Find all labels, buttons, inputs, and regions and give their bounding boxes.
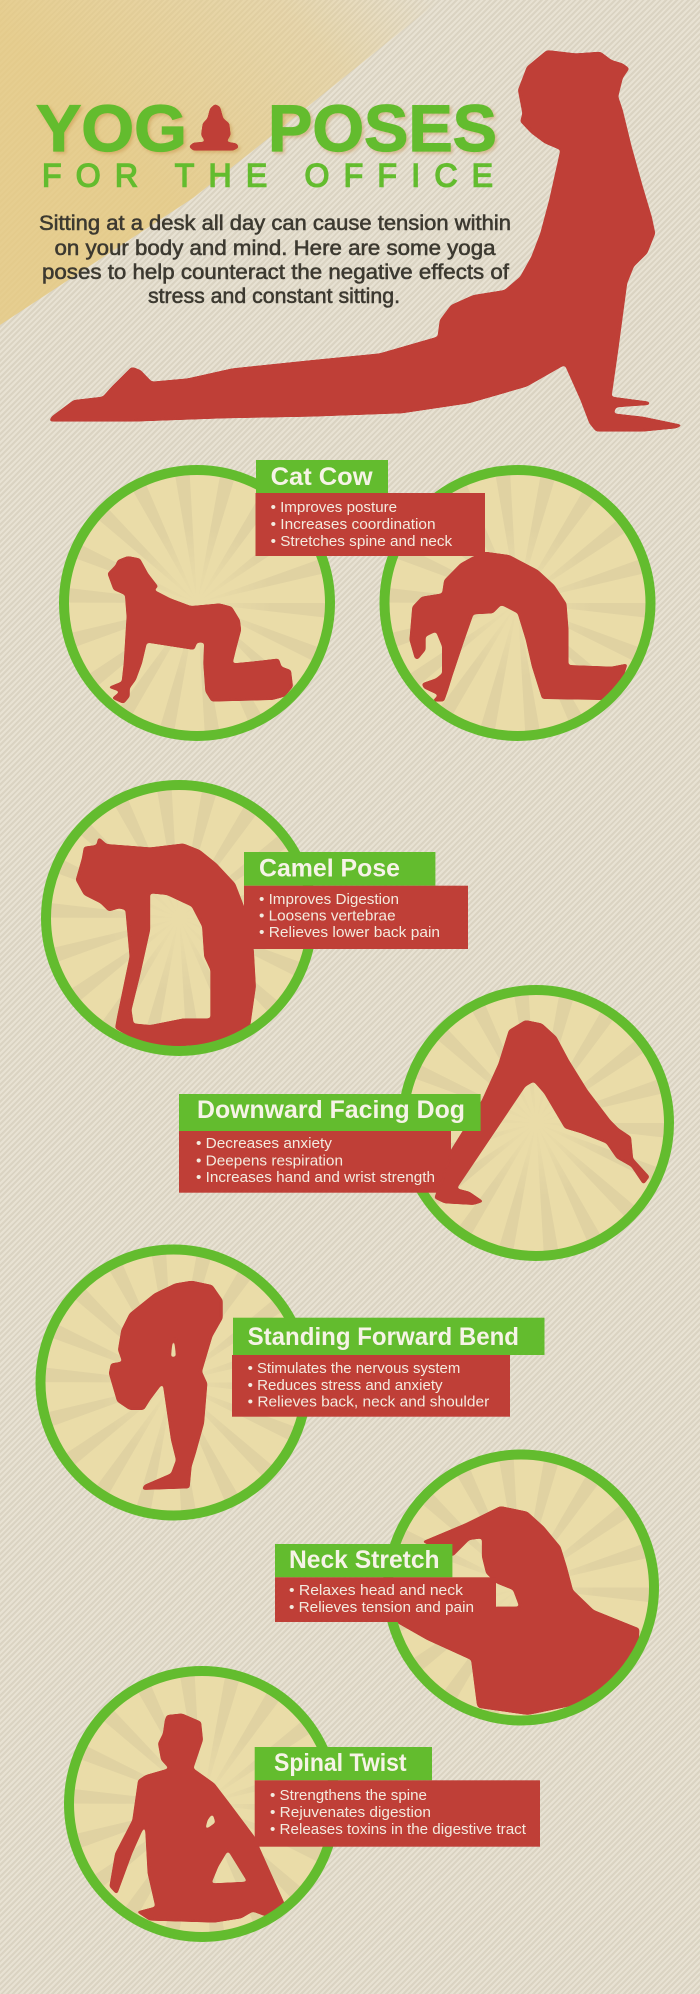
silhouette: forward bend: [109, 1281, 223, 1490]
benefits: standing forward bend: • Stimulates the nervous system: [248, 1361, 460, 1377]
silhouette: spinal twist: [109, 1713, 285, 1923]
background corner triangle: [0, 0, 440, 325]
label: downward facing dog title: [179, 1094, 481, 1131]
silhouette: neck stretch: [395, 1506, 639, 1715]
title: [36, 91, 497, 165]
benefits: cat cow: • Stretches spine and neck: [271, 534, 453, 550]
label: standing forward bend title: [233, 1318, 544, 1355]
silhouette: cow pose: [409, 552, 628, 702]
label: spinal twist title: Spinal Twist: [274, 1749, 407, 1777]
silhouette: downward dog: [434, 1020, 650, 1205]
label: cat cow title: Cat Cow: [271, 463, 373, 491]
intro paragraph: Sitting at a desk all day can cause tension within: [39, 212, 511, 235]
label: neck stretch title: Neck Stretch: [289, 1546, 440, 1574]
silhouette: camel pose: [76, 837, 256, 1047]
benefits: camel pose: • Loosens vertebrae: [259, 909, 396, 925]
label: camel pose title: [244, 852, 435, 886]
benefits: downward facing dog: • Decreases anxiety: [196, 1136, 333, 1152]
benefits: camel pose: • Improves Digestion: [259, 892, 399, 908]
benefits: downward facing dog: • Deepens respiration: [196, 1154, 343, 1170]
intro paragraph: [39, 212, 511, 308]
hero: cobra pose silhouette: [49, 50, 683, 432]
panel: camel pose: [45, 784, 468, 1052]
benefits: standing forward bend: [232, 1355, 510, 1417]
benefits: spinal twist: • Releases toxins in the digestive tract: [270, 1822, 526, 1838]
benefits: cat cow: • Improves posture: [271, 500, 397, 516]
benefits: cat cow: [256, 493, 485, 556]
benefits: spinal twist: • Strengthens the spine: [270, 1788, 427, 1804]
benefits: downward facing dog: • Increases hand and wrist strength: [196, 1170, 435, 1186]
benefits: spinal twist: • Rejuvenates digestion: [270, 1805, 431, 1821]
benefits: neck stretch: • Relaxes head and neck: [289, 1583, 464, 1599]
benefits: neck stretch: • Relieves tension and pain: [289, 1600, 474, 1616]
benefits: neck stretch: [275, 1577, 496, 1622]
label: standing forward bend title: Standing Forward Bend: [248, 1323, 519, 1351]
benefits: cat cow: • Increases coordination: [271, 517, 436, 533]
benefits: camel pose: • Relieves lower back pain: [259, 925, 440, 941]
silhouette: cat pose: [107, 556, 293, 704]
label: cat cow title: [256, 460, 388, 493]
panel: downward facing dog: [179, 989, 670, 1257]
title: YOG: [36, 91, 187, 165]
panel: standing forward bend: [40, 1248, 544, 1516]
benefits: spinal twist: [255, 1780, 540, 1847]
panel: neck stretch: [275, 1454, 655, 1722]
subtitle: FOR THE OFFICE: [42, 158, 493, 194]
label: camel pose title: Camel Pose: [259, 855, 400, 883]
title: POSES: [268, 91, 497, 165]
label: spinal twist title: [255, 1747, 432, 1780]
benefits: downward facing dog: [179, 1131, 451, 1193]
icon: meditating figure as the letter A: [189, 104, 239, 151]
panel: spinal twist: [68, 1670, 540, 1938]
benefits: standing forward bend: • Reduces stress and anxiety: [248, 1378, 443, 1394]
cat pose circle: [63, 469, 331, 737]
cow pose circle: [384, 469, 652, 737]
label: downward facing dog title: Downward Facing Dog: [197, 1096, 465, 1124]
intro paragraph: poses to help counteract the negative effects of: [42, 261, 509, 284]
intro paragraph: stress and constant sitting.: [148, 285, 400, 308]
intro paragraph: on your body and mind. Here are some yoga: [54, 237, 496, 260]
benefits: standing forward bend: • Relieves back, neck and shoulder: [248, 1395, 489, 1411]
benefits: camel pose: [244, 886, 468, 949]
panel: cat cow: [63, 460, 652, 737]
